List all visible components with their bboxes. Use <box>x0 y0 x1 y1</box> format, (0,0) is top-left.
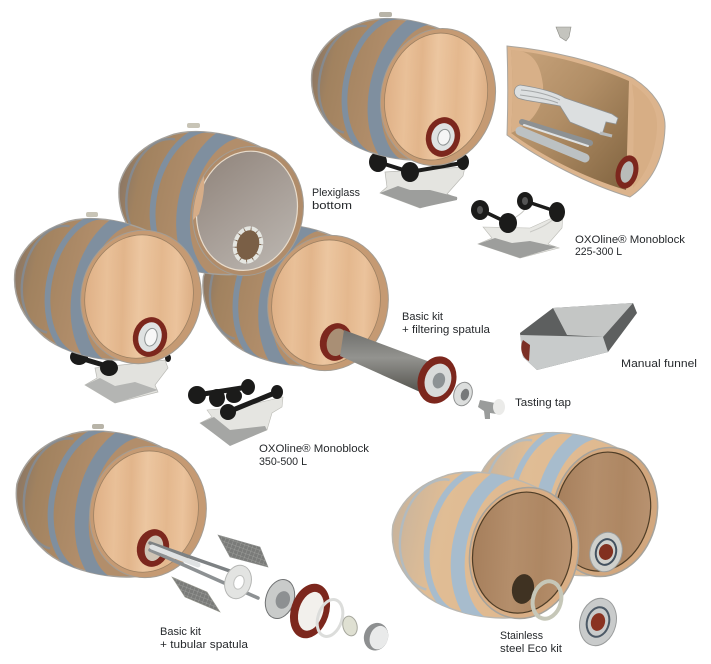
barrel: Monoblock 350-500 L <box>0 194 216 403</box>
cap fitting <box>451 380 475 408</box>
barrel: top with Monoblock 225-300 L <box>296 0 510 208</box>
clear retaining ring <box>313 596 347 640</box>
bung: left barrel <box>86 212 98 217</box>
hole: front barrel <box>510 572 536 606</box>
filtering spatula tube <box>340 330 430 392</box>
port: middle barrel <box>316 320 356 364</box>
label: tasting tap: Tasting tap <box>515 397 571 409</box>
disc: white support <box>220 562 256 602</box>
support: top barrel rollers and bracket <box>369 152 469 208</box>
monoblock: 225-300 L <box>471 192 565 258</box>
barrel: basic kit + filtering spatula <box>187 201 475 409</box>
label: manual funnel: Manual funnel <box>621 358 697 370</box>
label: filtering spatula: Basic kit <box>402 311 443 323</box>
component: tubes <box>520 122 590 158</box>
filter plate: lower <box>172 577 220 612</box>
label: tubular spatula: + tubular spatula <box>160 639 249 651</box>
label: Monoblock 350-500 L: 350-500 L <box>259 456 307 468</box>
barrel shape: front <box>376 447 593 642</box>
end cap <box>360 620 392 654</box>
bung: top barrel <box>379 12 392 17</box>
barrel shape: bottom-left <box>0 406 221 602</box>
red gasket ring <box>283 578 337 644</box>
label: tubular spatula: Basic kit <box>160 626 201 638</box>
label: plexiglass bottom: Plexiglass <box>312 187 360 199</box>
red flange <box>412 351 462 409</box>
port: cutaway red ring <box>612 153 642 191</box>
tan sliver <box>193 176 204 220</box>
filter plate: upper <box>218 535 268 567</box>
barrel shape: left <box>0 194 216 385</box>
barrel shape: top <box>296 0 510 185</box>
label: stainless steel eco kit: steel Eco kit <box>500 643 562 655</box>
label: Monoblock 350-500 L: OXOline® Monoblock <box>259 443 370 455</box>
barrel shape: middle <box>187 201 403 391</box>
label: Monoblock 225-300 L: 225-300 L <box>575 246 622 258</box>
component: filtering spatula <box>514 85 618 136</box>
support: left barrel <box>70 349 171 403</box>
plug: cutaway <box>556 27 571 41</box>
port: bottom-left barrel <box>133 526 173 570</box>
barrel shape: plexiglass <box>103 107 318 299</box>
label: Monoblock 225-300 L: OXOline® Monoblock <box>575 234 686 246</box>
barrel: basic kit + tubular spatula <box>0 406 392 654</box>
bung: bottom-left barrel <box>92 424 104 429</box>
manual funnel <box>520 303 637 370</box>
label: filtering spatula: + filtering spatula <box>402 324 491 336</box>
port: plexiglass white ring <box>231 225 265 265</box>
eco cap loose <box>574 594 622 650</box>
barrels: stainless steel Eco kit <box>376 408 672 650</box>
small insert <box>341 615 359 637</box>
eco ring <box>529 578 565 622</box>
bung: plexiglass barrel <box>187 123 200 128</box>
cutaway barrel <box>507 46 665 197</box>
label: stainless steel eco kit: Stainless <box>500 630 543 642</box>
port: left barrel <box>128 313 172 361</box>
label: plexiglass bottom: bottom <box>312 200 352 212</box>
monoblock: 350-500 L <box>188 379 283 446</box>
tubular spatula rods <box>150 543 258 598</box>
disc: metal flange <box>261 576 299 622</box>
port: red ring <box>421 113 465 161</box>
barrel: plexiglass bottom <box>103 107 318 299</box>
barrel shape: back <box>460 408 672 599</box>
tasting tap <box>478 399 505 419</box>
port: back barrel eco <box>585 529 627 575</box>
